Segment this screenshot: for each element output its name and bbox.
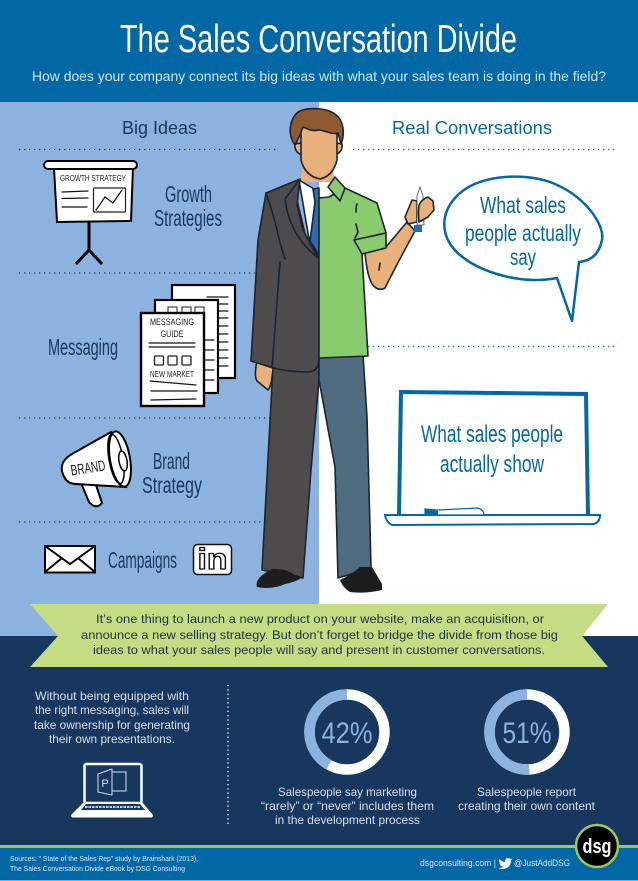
panel: real conversations background — [319, 102, 638, 636]
right trouser — [319, 355, 371, 578]
arm — [365, 222, 415, 289]
panel: dark bottom section — [0, 636, 638, 845]
icon: laptop with presentation: P — [101, 778, 109, 790]
left trouser — [262, 360, 319, 578]
icon: whiteboard: What sales people — [421, 421, 563, 448]
banner — [30, 604, 608, 667]
icon: messaging guide documents: MESSAGING — [150, 317, 194, 328]
chart: 51 percent donut — [490, 694, 564, 770]
banner: announce a new selling strategy. But don’t forget to bridge the divide from those big — [81, 628, 558, 642]
caption: 42 percent: Salespeople say marketing — [278, 785, 417, 799]
label: campaigns: Campaigns — [108, 547, 177, 573]
icon: envelope — [45, 546, 95, 572]
chart: 42 percent donut — [310, 694, 384, 770]
panel: header — [0, 0, 638, 102]
label: brand strategy: Strategy — [142, 472, 202, 498]
hair — [290, 109, 343, 145]
left hand — [255, 358, 274, 390]
label: growth strategies: Growth — [165, 181, 212, 207]
icon: messaging guide documents — [141, 285, 235, 406]
icon: laptop with presentation — [71, 764, 153, 818]
icon: growth strategy flip chart — [44, 161, 137, 264]
caption: 42 percent — [261, 785, 434, 827]
panel: footer — [0, 825, 638, 881]
face — [301, 125, 337, 179]
text block: without being equipped: take ownership for generating — [34, 718, 190, 732]
icon: linkedin: in — [198, 543, 228, 576]
label: growth strategies — [154, 181, 222, 231]
callout: speech bubble: people actually — [465, 220, 581, 246]
caption: 51 percent: creating their own content — [458, 799, 596, 813]
marker — [417, 187, 424, 225]
white shirt — [299, 180, 319, 258]
label: brand strategy — [142, 448, 202, 498]
text block: without being equipped: Without being equipped with — [35, 689, 189, 703]
panel: big ideas background — [0, 102, 319, 636]
chart: 51 percent donut: 51% — [502, 717, 552, 750]
icon: messaging guide documents: NEW MARKET — [150, 369, 194, 379]
fist — [418, 197, 434, 222]
icon: brand megaphone — [62, 430, 135, 506]
icon: brand megaphone: BRAND — [69, 457, 107, 480]
icon: messaging guide documents: GUIDE — [160, 329, 184, 340]
text block: without being equipped: the right messaging, sales will — [35, 703, 189, 717]
figure: half suit half casual man — [251, 109, 434, 593]
sources — [10, 854, 198, 873]
chart: 42 percent donut: 42% — [322, 717, 372, 750]
website: dsgconsulting.com | — [420, 858, 496, 869]
ears — [295, 143, 342, 155]
tie — [310, 188, 319, 255]
caption: 51 percent: Salespeople report — [477, 785, 577, 799]
callout: speech bubble: say — [510, 244, 536, 270]
green shirt — [319, 188, 386, 358]
heading: real conversations: Real Conversations — [392, 118, 552, 138]
neck — [300, 165, 335, 182]
icon: growth strategy flip chart: GROWTH STRATEGY — [60, 173, 126, 183]
callout: speech bubble — [444, 177, 602, 321]
left shoe — [257, 569, 303, 588]
caption: 42 percent: in the development process — [275, 813, 420, 827]
text block: without being equipped: their own presentations. — [49, 732, 175, 746]
label: brand strategy: Brand — [153, 448, 190, 474]
caption: 51 percent — [458, 785, 596, 813]
icon: whiteboard — [385, 392, 600, 525]
jacket — [251, 179, 319, 372]
sources: Sources: " State of the Sales Rep" study by Brainshark (2013), — [10, 854, 198, 863]
thumb — [405, 200, 417, 224]
twitter handle: @JustAddDSG — [514, 858, 570, 869]
right shoe — [340, 567, 382, 593]
text block: without being equipped — [34, 689, 190, 746]
lapel — [285, 179, 318, 258]
callout: speech bubble: What sales — [480, 192, 566, 218]
logo: dsg — [576, 825, 618, 867]
banner: ideas to what your sales people will say and present in customer conversations. — [93, 643, 545, 657]
heading: big ideas: Big Ideas — [122, 118, 197, 138]
subtitle: How does your company connect its big ideas with what your sales team is doing in the field? — [32, 68, 606, 84]
label: growth strategies: Strategies — [154, 205, 222, 231]
label: messaging: Messaging — [48, 334, 118, 360]
logo: dsg: dsg — [582, 836, 612, 858]
icon: whiteboard: actually show — [440, 451, 544, 478]
shirt collar — [328, 177, 345, 201]
caption: 42 percent: “rarely” or “never” includes them — [261, 799, 434, 813]
sources: The Sales Conversation Divide eBook by DSG Consulting — [10, 864, 185, 873]
banner: It’s one thing to launch a new product on your website, make an acquisition, or — [96, 612, 544, 626]
icon: twitter bird — [499, 858, 512, 869]
